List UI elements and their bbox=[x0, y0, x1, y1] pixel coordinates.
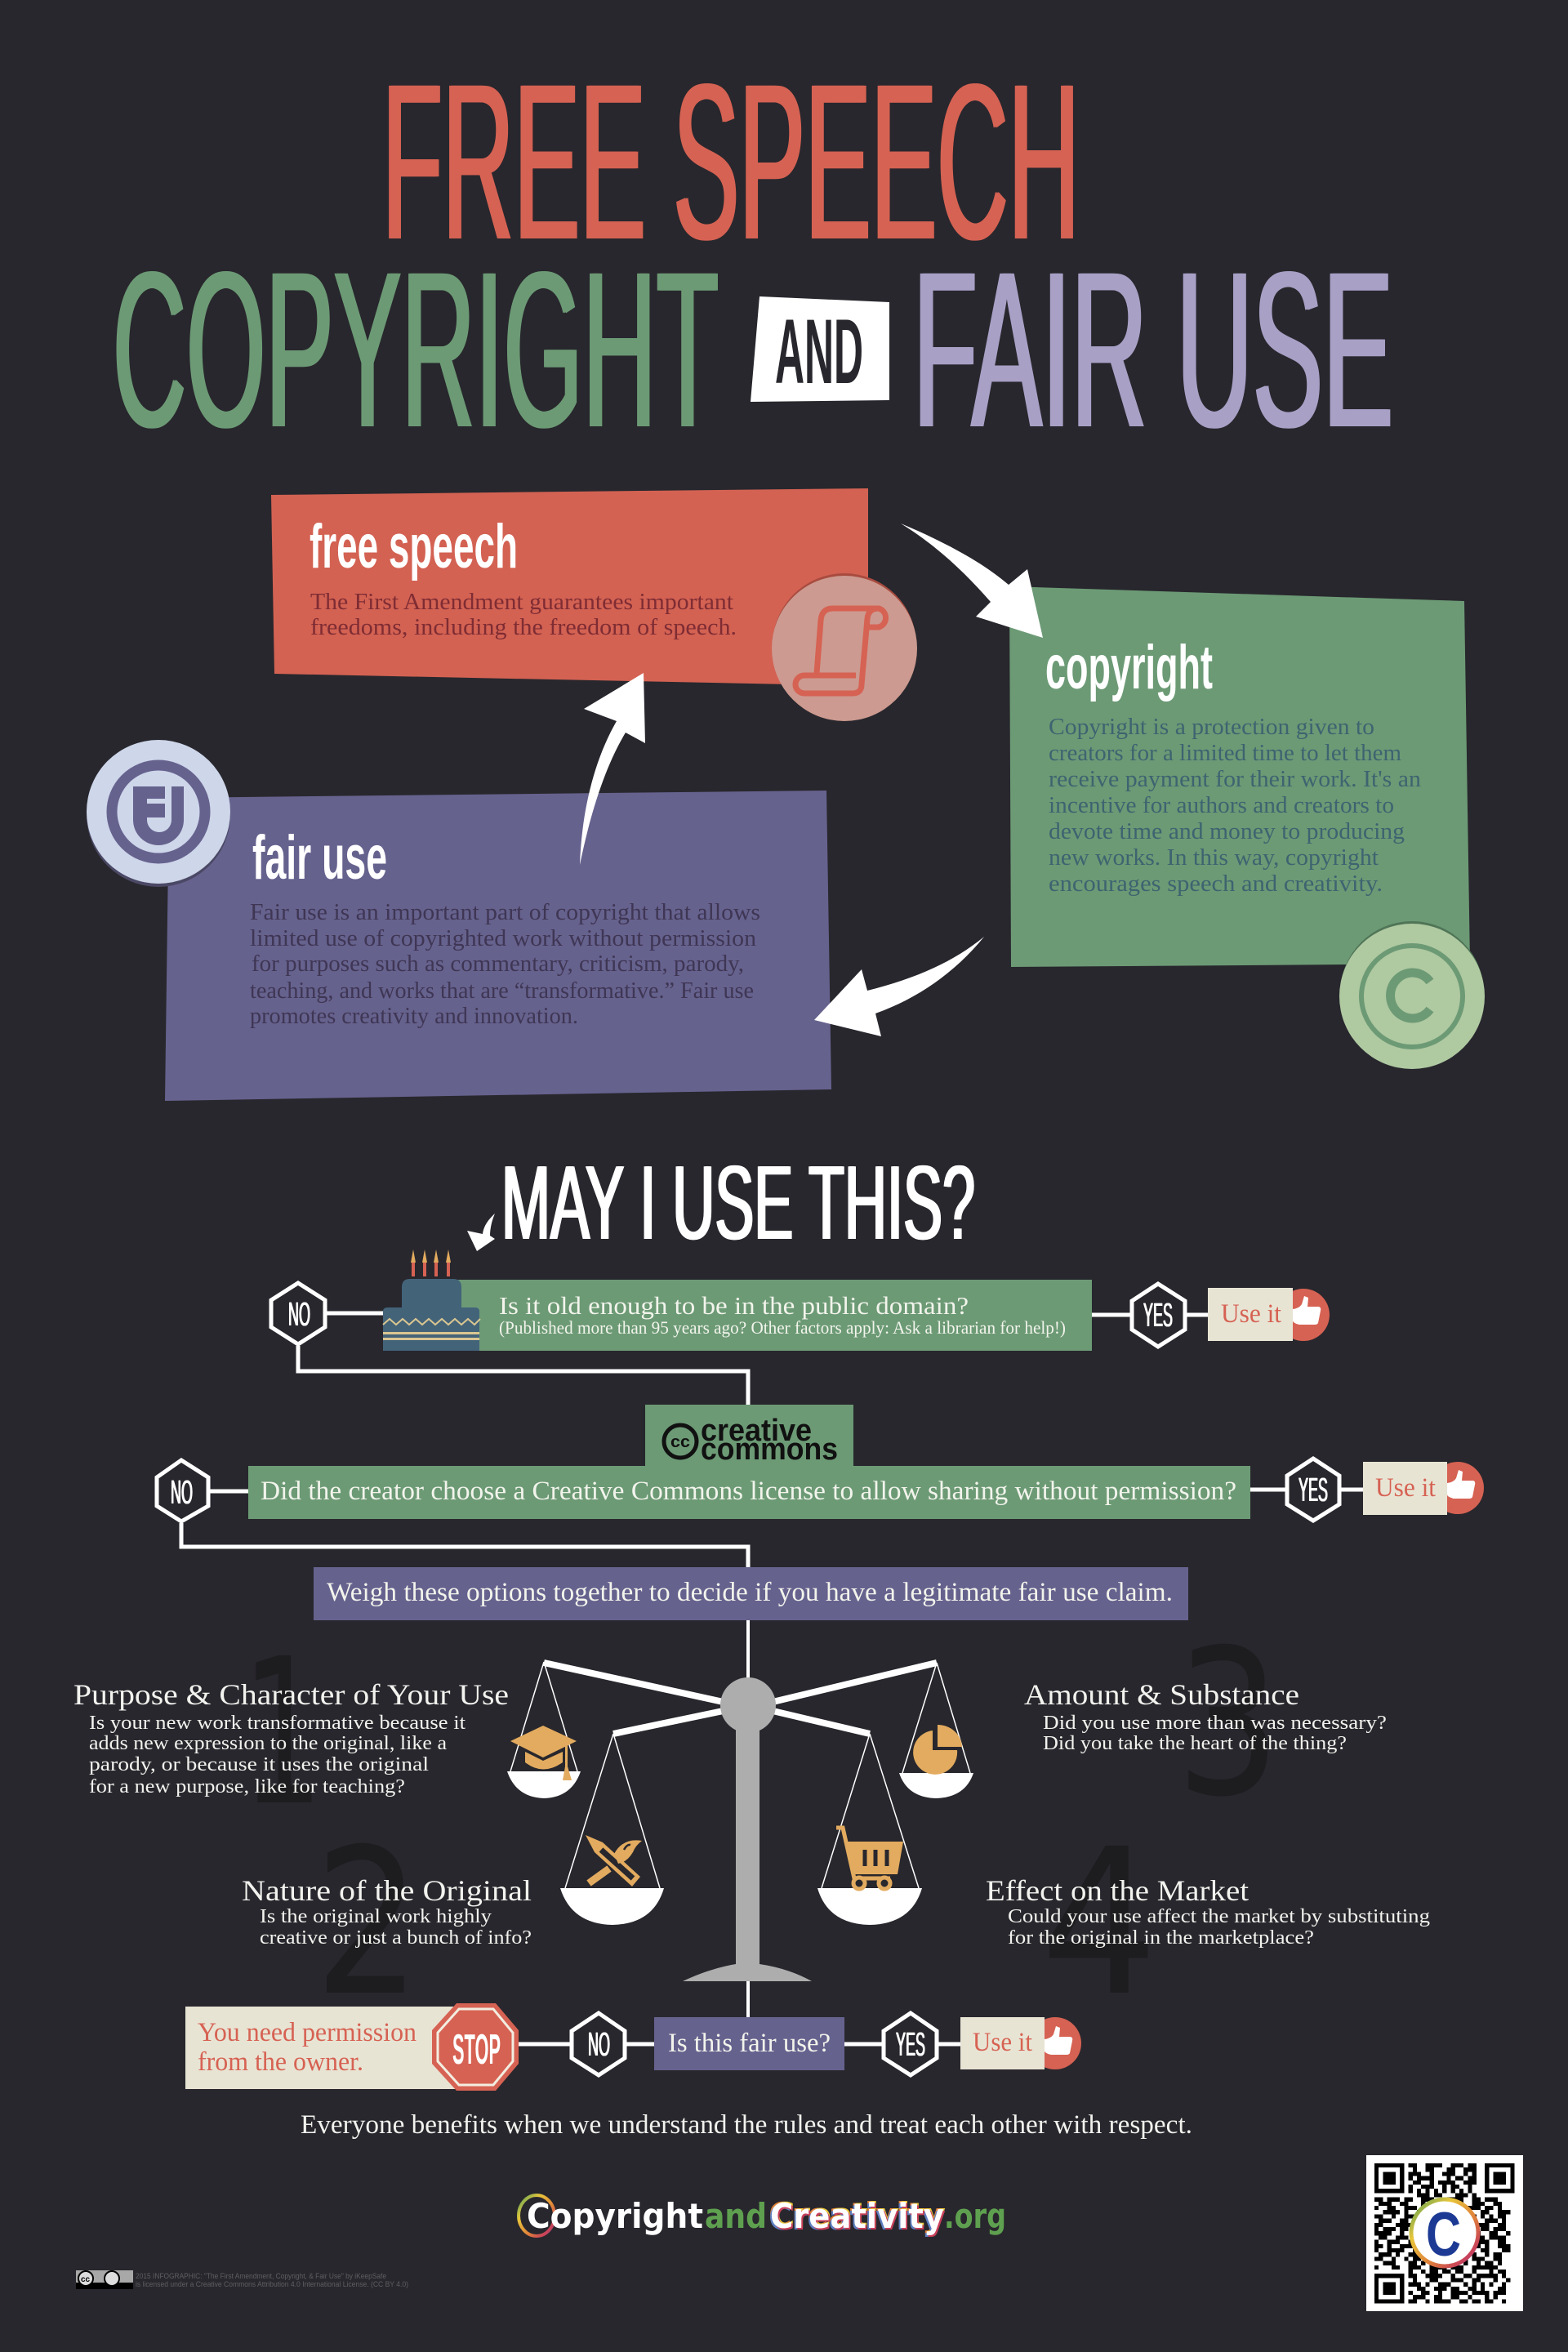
license badge bbox=[76, 2270, 133, 2289]
arrow: copyright to fair use bbox=[814, 937, 984, 1036]
factor 2: nature of the original: Nature of the Original bbox=[242, 1874, 532, 1907]
badge: yes: YES bbox=[1143, 1296, 1173, 1334]
step: weigh options: Weigh these options together to decide if you have a legitimate fair use claim. bbox=[327, 1578, 1173, 1607]
text: copyright description: encourages speech and creativity. bbox=[1049, 871, 1383, 897]
icon: stop sign bbox=[432, 2003, 519, 2091]
license badge: cc bbox=[81, 2275, 91, 2284]
step: is this fair use bbox=[654, 2017, 844, 2070]
icon: shopping cart bbox=[836, 1828, 903, 1889]
logo: copyright and creativity: and bbox=[705, 2196, 767, 2236]
outcome: use it: Use it bbox=[973, 2028, 1032, 2057]
scale pan: amount bbox=[899, 1663, 973, 1798]
icon: fair use symbol bbox=[87, 740, 230, 887]
factor 3: amount and substance: Did you use more than was necessary? bbox=[1043, 1713, 1387, 1734]
text: copyright description: receive payment for their work. It's an bbox=[1049, 767, 1421, 792]
logo: creative commons: commons bbox=[701, 1432, 838, 1467]
text: free speech description: The First Amendment guarantees important bbox=[310, 589, 733, 615]
title word: and: AND bbox=[775, 301, 863, 403]
logo: creative commons bbox=[664, 1414, 838, 1467]
badge: no bbox=[572, 2013, 625, 2075]
text: copyright description: Copyright is a protection given to bbox=[1049, 715, 1374, 740]
factor 4: effect on the market: for the original in the marketplace? bbox=[1008, 1927, 1314, 1949]
flowchart connector lines bbox=[181, 1313, 1363, 2044]
step: is this fair use: Is this fair use? bbox=[668, 2029, 831, 2058]
scale stand bbox=[683, 1677, 812, 1981]
factor 3: amount and substance: Amount & Substance bbox=[1024, 1678, 1299, 1711]
badge: no: NO bbox=[588, 2025, 610, 2063]
big background numbers: 4 bbox=[1040, 1806, 1158, 2041]
text: fair use description bbox=[250, 900, 760, 1029]
closing statement: Everyone benefits when we understand the rules and treat each other with respect. bbox=[301, 2110, 1192, 2140]
factor 4: effect on the market: Effect on the Market bbox=[986, 1874, 1249, 1907]
text: fair use description: for purposes such as commentary, criticism, parody, bbox=[252, 951, 744, 977]
scale bbox=[507, 1662, 973, 1981]
outcome: use it: Use it bbox=[1375, 1473, 1436, 1503]
icon: copyright symbol bbox=[1339, 921, 1485, 1069]
outcome: use it: Use it bbox=[1221, 1299, 1281, 1329]
factor 1: purpose and character bbox=[74, 1678, 509, 1797]
text: public domain question: Is it old enough to be in the public domain? bbox=[499, 1291, 969, 1320]
text: fair use description: Fair use is an important part of copyright that allows bbox=[250, 900, 760, 925]
badge: no bbox=[157, 1460, 208, 1521]
icon: QR logo bbox=[1411, 2199, 1478, 2270]
outcome: use it bbox=[960, 2017, 1081, 2069]
text: copyright description bbox=[1049, 715, 1421, 897]
scale pan: purpose bbox=[507, 1662, 581, 1798]
step: creative commons question bbox=[248, 1405, 1250, 1519]
logo: copyright and creativity: .org bbox=[944, 2196, 1006, 2236]
factor 3: amount and substance bbox=[1024, 1678, 1387, 1754]
big background numbers: 2 bbox=[314, 1806, 421, 2041]
text: creative commons question: Did the creator choose a Creative Commons license to allow sharing without permission? bbox=[261, 1477, 1236, 1506]
title word: and bbox=[751, 296, 889, 403]
logo: creative commons: creative bbox=[701, 1414, 812, 1448]
icon: pencil and paintbrush bbox=[586, 1835, 642, 1886]
big background numbers: 1 bbox=[242, 1616, 323, 1851]
icon: stop sign: STOP bbox=[452, 2026, 501, 2074]
scale pan: nature bbox=[560, 1734, 664, 1925]
factor 2: nature of the original bbox=[242, 1874, 532, 1949]
scale pan: market bbox=[817, 1734, 922, 1925]
factor 1: purpose and character: adds new expression to the original, like a bbox=[89, 1733, 447, 1754]
factor 1: purpose and character: Is your new work transformative because it bbox=[89, 1713, 466, 1734]
factor 4: effect on the market bbox=[986, 1874, 1430, 1949]
QR code bbox=[1366, 2155, 1523, 2311]
heading: free speech: free speech bbox=[310, 512, 518, 581]
big background numbers: 3 bbox=[1176, 1607, 1281, 1842]
badge: no bbox=[271, 1283, 325, 1344]
badge: no: NO bbox=[171, 1473, 193, 1511]
panel: free speech bbox=[271, 488, 917, 721]
badge: yes bbox=[1132, 1284, 1185, 1347]
text: free speech description bbox=[310, 589, 737, 640]
factor 1: purpose and character: parody, or because it uses the original bbox=[89, 1754, 429, 1775]
license text: is licensed under a Creative Commons Attribution 4.0 International License. (CC BY 4.0) bbox=[136, 2280, 408, 2288]
icon: pie chart bbox=[913, 1725, 962, 1775]
outcome: need permission: from the owner. bbox=[198, 2047, 363, 2077]
icon: graduation cap bbox=[510, 1726, 577, 1780]
badge: yes bbox=[884, 2013, 937, 2075]
title: COPYRIGHT bbox=[113, 225, 719, 474]
logo: creative commons: cc bbox=[670, 1433, 690, 1451]
logo: copyright and creativity: Creativity bbox=[770, 2196, 944, 2236]
factor 2: nature of the original: creative or just a bunch of info? bbox=[260, 1927, 532, 1949]
big background numbers bbox=[242, 1607, 1281, 2041]
arrow: free speech to copyright bbox=[901, 523, 1043, 638]
text: copyright description: creators for a limited time to let them bbox=[1049, 741, 1401, 766]
text: fair use description: teaching, and works that are “transformative.” Fair use bbox=[250, 978, 754, 1004]
panel: copyright bbox=[1009, 586, 1485, 1069]
text: fair use description: limited use of copyrighted work without permission bbox=[250, 926, 756, 951]
outcome: use it bbox=[1363, 1462, 1484, 1515]
heading: fair use: fair use bbox=[252, 823, 387, 893]
scale beams bbox=[544, 1663, 937, 1734]
text: free speech description: freedoms, including the freedom of speech. bbox=[310, 614, 737, 640]
heading: copyright: copyright bbox=[1045, 633, 1213, 702]
icon: QR logo: C bbox=[1426, 2200, 1461, 2270]
step: weigh options bbox=[314, 1567, 1188, 1620]
factor 1: purpose and character: for a new purpose, like for teaching? bbox=[89, 1776, 405, 1797]
arrow: fair use to free speech bbox=[580, 673, 645, 865]
title bbox=[113, 38, 1393, 474]
heading: may I use this: MAY I USE THIS? bbox=[501, 1144, 975, 1262]
arrow: heading to flowchart bbox=[467, 1214, 495, 1251]
badge: yes: YES bbox=[896, 2025, 925, 2063]
outcome: use it bbox=[1208, 1288, 1330, 1341]
factor 3: amount and substance: Did you take the heart of the thing? bbox=[1043, 1733, 1347, 1754]
text: fair use description: promotes creativity and innovation. bbox=[250, 1004, 578, 1029]
factor 1: purpose and character: Purpose & Character of Your Use bbox=[74, 1678, 509, 1711]
panel: fair use bbox=[87, 740, 831, 1101]
badge: no: NO bbox=[288, 1295, 310, 1333]
outcome: need permission: You need permission bbox=[198, 2018, 416, 2047]
step: public domain question bbox=[383, 1250, 1092, 1351]
license text bbox=[136, 2272, 408, 2288]
text: public domain note: (Published more than 95 years ago? Other factors apply: Ask a librarian for help!) bbox=[499, 1317, 1066, 1338]
icon: scroll bbox=[772, 573, 917, 721]
factor 4: effect on the market: Could your use affect the market by substituting bbox=[1008, 1906, 1430, 1927]
text: copyright description: new works. In this way, copyright bbox=[1049, 845, 1379, 871]
text: copyright description: incentive for authors and creators to bbox=[1049, 793, 1394, 818]
factor 2: nature of the original: Is the original work highly bbox=[260, 1906, 492, 1927]
icon: birthday cake bbox=[383, 1250, 480, 1351]
text: copyright description: devote time and money to producing bbox=[1049, 819, 1405, 844]
logo: copyright and creativity: Copyright bbox=[527, 2196, 703, 2236]
badge: yes: YES bbox=[1298, 1471, 1328, 1508]
logo: copyright and creativity bbox=[519, 2195, 1006, 2236]
license text: 2015 INFOGRAPHIC: "The First Amendment, Copyright, & Fair Use" by iKeepSafe bbox=[136, 2272, 386, 2280]
outcome: need permission bbox=[185, 2003, 519, 2091]
badge: yes bbox=[1287, 1459, 1339, 1521]
